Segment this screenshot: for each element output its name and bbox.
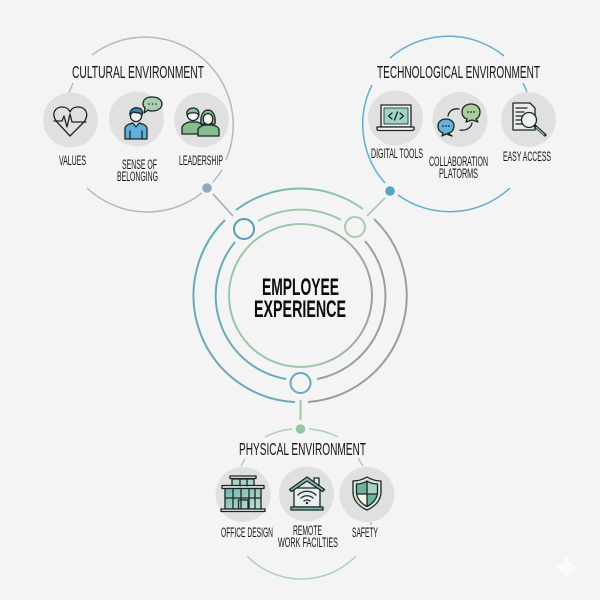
connector: cultural [213,194,233,216]
icon: values heart [43,92,98,148]
label: remote work facilities [278,523,338,550]
panel: technological environment [363,36,556,212]
title: employee experience [254,274,346,323]
connector: technological [367,198,385,216]
icon: collaboration bubbles [432,92,488,147]
label: remote work facilities: WORK FACILTIES [278,535,338,550]
heading: physical environment: PHYSICAL ENVIRONMENT [239,439,366,459]
icon: easy access document [501,92,556,147]
icon: office building [216,467,270,522]
icon: sparkle watermark [553,554,580,581]
label: sense of belonging: SENSE OF [122,157,157,172]
panel: physical environment: SAFETY [352,525,378,540]
label: leadership: LEADERSHIP [179,153,223,168]
dot: physical [296,424,305,434]
title: employee experience: EMPLOYEE [262,274,339,301]
label: easy access: EASY ACCESS [503,149,551,164]
label: remote work facilities: REMOTE [293,523,322,538]
node: teal ring [234,219,254,239]
connector: physical [300,400,302,420]
icon: sense of belonging [109,92,164,146]
label: sense of belonging: BELONGING [117,169,158,184]
panel: cultural environment [43,37,233,212]
label: sense of belonging [117,157,158,184]
node: blue ring [290,373,310,393]
arc: physical ring [241,429,371,579]
central rings [193,188,407,402]
arc: technological ring [363,36,527,212]
heading: cultural environment: CULTURAL ENVIRONMENT [72,62,204,82]
label: collaboration platforms: PLATORMS [439,166,478,181]
panel: physical environment [216,424,394,579]
label: values: VALUES [59,153,86,168]
panel: physical environment: OFFICE DESIGN [221,525,273,540]
arc: cultural ring [69,37,233,212]
label: collaboration platforms [429,154,488,181]
label: collaboration platforms: COLLABORATION [429,154,488,169]
icon: safety shield [340,467,394,522]
icon: remote work house wifi [279,466,334,522]
dot: cultural [202,183,212,193]
node: green ring [345,217,365,237]
dot: technological [385,186,395,196]
label: digital tools: DIGITAL TOOLS [371,146,423,161]
title: employee experience: EXPERIENCE [254,296,346,323]
icon: digital tools laptop [368,90,423,146]
icon: leadership [174,92,229,148]
